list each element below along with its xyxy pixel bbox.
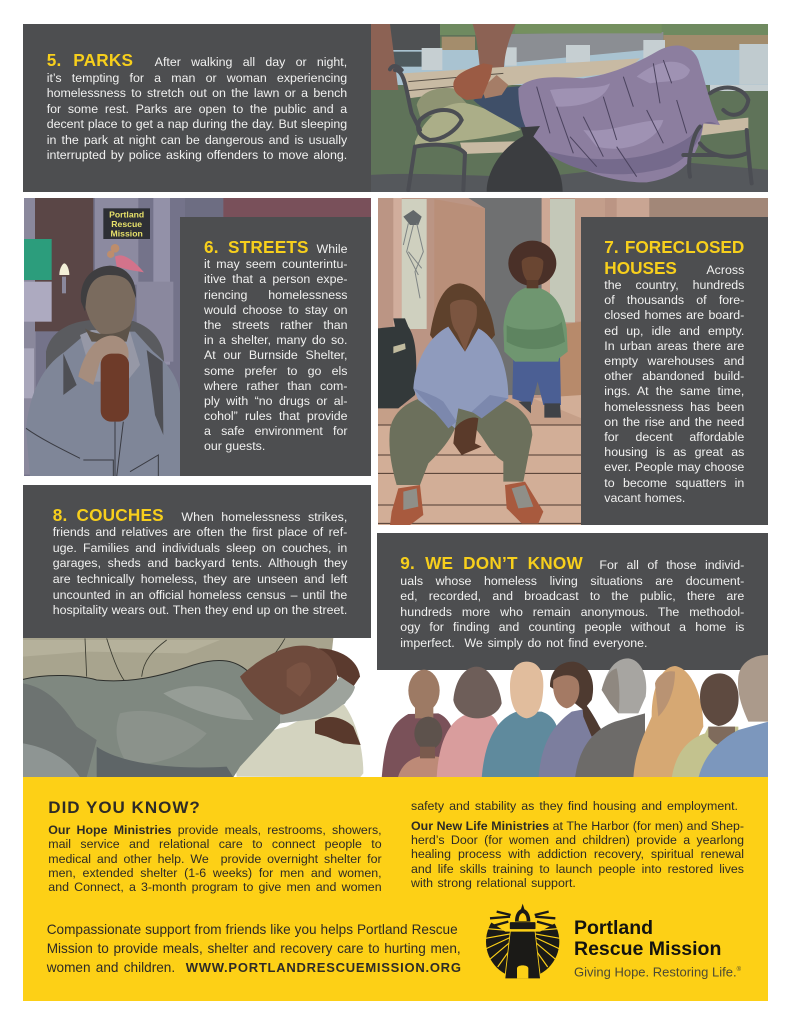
man in blue shirt (698, 655, 768, 778)
text: hope ministries: men, extended shelter (1-6 weeks) for men and women, (48, 866, 382, 880)
panel 8 copy: hospitality wears out. Then they end up on the street. (53, 603, 347, 617)
panel 5 copy (46, 50, 348, 162)
tagline: Giving Hope. Restoring Life.: Giving Hope. Restoring Life.® (574, 964, 741, 979)
logo: lighthouse (486, 904, 560, 978)
woman looking back (538, 662, 602, 778)
panel 7 copy: on the rise and the need (604, 415, 744, 429)
panel 6 copy: it may seem counterintu- (204, 257, 348, 271)
heading: 6. streets: 6. STREETS While (204, 237, 348, 257)
panel 7 copy: other abandoned build- (604, 369, 744, 383)
panel 7 copy: ed up, idle and empty. (604, 324, 744, 338)
child (398, 717, 443, 778)
heading: 9. we don't know: 9. WE DON’T KNOW For all of those individ- (400, 553, 744, 573)
sign: Portland Rescue Mission: Rescue (111, 219, 142, 229)
text: hope ministries: Our Hope Ministries provide meals, restrooms, showers, (48, 823, 382, 837)
panel: 9 we don't know text (377, 533, 768, 670)
panel 7 copy: for decent affordable (604, 430, 744, 444)
panel 6 copy: would choose to stay on (204, 303, 348, 317)
text: hope ministries: and Connect, a 3-month program to give men and women (48, 880, 382, 894)
illustration: man with bottle on street outside Portland Rescue Mission (24, 198, 371, 476)
panel 6 copy (204, 237, 348, 453)
woman (389, 283, 543, 525)
man in maroon (382, 670, 455, 778)
panel 5 copy: homelessness to stretch out on the lawn or a bench (47, 86, 347, 100)
text: new life ministries: healing process with addiction recovery, spiritual renewal (411, 847, 744, 861)
panel 7 copy: ings. At the same time, (604, 384, 744, 398)
panel 9 copy: ogy for finding and counting people without a home is (400, 620, 744, 634)
panel 7 copy: of thousands of fore- (604, 293, 744, 307)
panel 9 copy: imperfect. We simply do not find everyone. (400, 636, 647, 650)
text: new life ministries: herd’s Door (for women and children) provide a yearlong (411, 833, 744, 847)
text: compassionate support call to action: women and children. (47, 960, 175, 975)
panel 6 copy: At our Burnside Shelter, (204, 348, 348, 362)
panel 5 copy: decent place to get a nap during the day. But sleeping (47, 117, 347, 131)
illustration: mother and child on foreclosed house steps (378, 198, 768, 525)
panel 9 copy: ed, recorded, and broadcast to the public, there are (400, 589, 744, 603)
panel 5 copy: interrupted by police asking offenders to move along. (47, 148, 347, 162)
text: new life ministries: safety and stability as they find housing and employment. (411, 799, 738, 813)
heading: 8. couches: 8. COUCHES When homelessness strikes, (53, 505, 347, 525)
panel 6 copy: cohol” rules that provide (204, 409, 348, 423)
illustration: crowd of people seen from behind with one woman looking back (382, 655, 768, 777)
panel 6 copy: the streets rather than (204, 318, 348, 332)
man in teal (482, 662, 560, 778)
panel 6 copy: itive that a person expe- (204, 272, 348, 286)
panel 6 copy: our guests. (204, 439, 265, 453)
text: compassionate support call to action: Compassionate support from friends like you helps Portland Rescue (47, 922, 458, 937)
panel 7 copy: empty warehouses and (604, 354, 744, 368)
text: new life ministries: with strong relational support. (411, 876, 576, 890)
panel 5 copy: in the park at night can be dangerous and is usually (47, 133, 347, 147)
panel 6 copy: a safe environment for (204, 424, 348, 438)
panel 6 copy: some prefer to go els (204, 364, 348, 378)
panel 8 copy: friends and relatives are often the first place of ref- (53, 525, 347, 539)
heading: did you know: DID YOU KNOW? (48, 798, 201, 817)
panel 7 copy (604, 236, 744, 505)
illustration: man sleeping on couch (23, 638, 364, 777)
panel 5 copy: it’s tempting for a man or woman experiencing (47, 71, 347, 85)
panel 6 copy: in a shelter, many do so. (204, 333, 348, 347)
panel 6 copy: ply with “no drugs or al- (204, 394, 348, 408)
text: compassionate support call to action: Mission to provide meals, shelter and recovery care to hurting men, (47, 941, 461, 956)
logo text: Portland Rescue Mission: Rescue Mission (574, 938, 721, 960)
panel 6 copy: riencing homelessness (204, 288, 348, 302)
text: hope ministries: mail service and relational care to connect people to (48, 837, 382, 851)
logo text: Portland Rescue Mission: Portland (574, 917, 653, 939)
text: compassionate support call to action: WWW.PORTLANDRESCUEMISSION.ORG (186, 960, 462, 975)
heading: 7. foreclosed: 7. FORECLOSED (604, 236, 744, 256)
panel 8 copy (52, 505, 348, 617)
sign: Portland Rescue Mission (103, 208, 150, 239)
panel 7 copy: HOUSES Across (604, 258, 744, 278)
logo text: Portland Rescue Mission (574, 917, 721, 960)
panel 6 copy: where rather than com- (204, 379, 348, 393)
man in grey (575, 658, 646, 778)
panel 7 copy: ever. People may choose (604, 460, 744, 474)
panel 7 copy: vacant homes. (604, 491, 685, 505)
panel 7 copy: homelessness has been (604, 400, 744, 414)
panel 8 copy: uge. Families and individuals sleep on couches, in (53, 541, 347, 555)
text: hope ministries (48, 823, 382, 894)
panel 8 copy: are technically homeless, they are unseen and left (53, 572, 347, 586)
sign: Portland Rescue Mission: Portland (109, 210, 144, 220)
panel: 5 parks text (23, 24, 371, 192)
panel 7 copy: closed homes are board- (604, 308, 744, 322)
panel 9 copy: uals whose homeless living situations are document- (400, 574, 744, 588)
text: compassionate support call to action (46, 922, 462, 975)
woman with blonde hair (633, 666, 703, 778)
text: new life ministries: Our New Life Ministries at The Harbor (for men) and Shep- (411, 819, 744, 833)
panel: 7 foreclosed houses text (581, 217, 768, 525)
woman in pink (437, 667, 502, 778)
panel 7 copy: the country, hundreds (604, 278, 744, 292)
text: new life ministries (411, 799, 744, 890)
text: new life ministries: and life skills training to launch people into restored lives (411, 862, 744, 876)
panel 9 copy: hundreds more who remain anonymous. The methodol- (400, 605, 744, 619)
panel 8 copy: uncounted in an official homeless census – until the (53, 588, 347, 602)
text: hope ministries: medical and other help. We provide overnight shelter for (48, 852, 382, 866)
panel 7 copy: In urban areas there are (604, 339, 744, 353)
panel 8 copy: garages, sheds and backyard tents. Although they (53, 556, 347, 570)
panel 7 copy: to become squatters in (604, 476, 744, 490)
panel: 6 streets text (180, 217, 371, 476)
panel: 8 couches text (23, 485, 371, 638)
heading: 5. parks: 5. PARKS After walking all day or night, (47, 50, 347, 70)
sign: Portland Rescue Mission: Mission (111, 228, 143, 238)
child (503, 241, 568, 418)
panel 5 copy: for some rest. Parks are open to the public and a (47, 102, 347, 116)
panel 7 copy: housing is as great as (604, 445, 744, 459)
panel: did you know (23, 777, 768, 1001)
man in olive shirt (672, 673, 739, 778)
illustration: man sleeping on park bench (371, 24, 768, 192)
panel 9 copy (400, 553, 744, 650)
